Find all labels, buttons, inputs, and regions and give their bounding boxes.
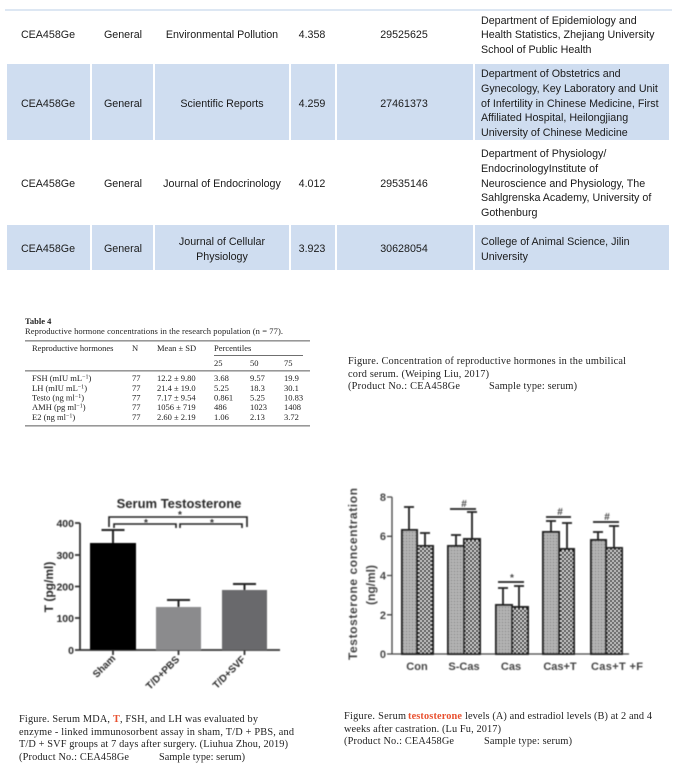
table 4 rows: Testo (ng ml (32, 392, 75, 402)
table row: Journal of Cellular Physiology: College of Animal Science, Jilin (481, 236, 630, 248)
table 4 rows: −1 (75, 394, 81, 400)
table row: Journal of Endocrinology: CEA458Ge (21, 178, 75, 190)
table 4 rows: 77 (132, 383, 140, 393)
significance brackets (109, 510, 247, 529)
table row: Environmental Pollution: CEA458Ge (21, 29, 75, 41)
table 4 rows: 30.1 (284, 383, 299, 393)
x axis labels (91, 653, 248, 692)
table row: Journal of Cellular Physiology: 30628054 (380, 243, 428, 255)
caption: serum MDA, T, FSH and LH: , FSH, and LH was evaluated by (120, 714, 259, 725)
table row: Scientific Reports (7, 64, 669, 140)
y axis and ticks: 400 (56, 518, 74, 530)
caption: hormone concentrations: Sample type: serum) (489, 381, 577, 392)
caption: serum MDA, T, FSH and LH (19, 714, 295, 763)
table row: Environmental Pollution (21, 15, 655, 56)
table 4 rows: 77 (132, 402, 140, 412)
x axis labels: Sham (91, 653, 118, 680)
y axis and ticks: 6 (380, 531, 386, 543)
table row: Journal of Endocrinology: Gothenburg (481, 207, 538, 219)
bar: Sham (90, 530, 136, 650)
table row: Scientific Reports: CEA458Ge (21, 98, 75, 110)
significance markers: # (461, 499, 467, 510)
y axis and ticks: 0 (68, 645, 74, 657)
caption: testosterone and estradiol levels: levels (A) and estradiol levels (B) at 2 and 4 (465, 711, 652, 722)
y axis and ticks: 300 (56, 550, 74, 562)
table 4 rows: 1408 (284, 402, 301, 412)
table 4 rows: 77 (132, 392, 140, 402)
table 4 rows: −1 (76, 404, 83, 410)
significance markers: # (557, 507, 563, 518)
x axis labels: Cas+T +F (591, 661, 643, 673)
table row: Journal of Endocrinology: EndocrinologyInstitute of (481, 163, 598, 175)
table 4 rows (32, 373, 303, 422)
table 4 rows: 5.25 (250, 392, 265, 402)
y axis and ticks: 4 (380, 570, 387, 582)
bars: Cas+T (543, 532, 574, 654)
y axis and ticks (56, 518, 280, 657)
table row: Journal of Endocrinology: Neuroscience and Physiology, The (481, 178, 645, 190)
table 4 rows: 9.57 (250, 373, 265, 383)
caption: serum MDA, T, FSH and LH: enzyme ‑ linked immunosorbent assay in sham, T/D + PBS, and (19, 727, 295, 738)
y axis and ticks: 2 (380, 610, 386, 622)
significance brackets: * (144, 518, 148, 529)
table row: Journal of Endocrinology: General (104, 178, 142, 190)
table 4 header (32, 343, 292, 368)
table 4: reproductive hormones (25, 316, 310, 426)
table 4 rows: E2 (ng ml (32, 412, 66, 422)
caption: testosterone and estradiol levels: Sample type: serum) (484, 736, 572, 747)
table row: Journal of Endocrinology (21, 148, 651, 219)
y axis and ticks: 0 (380, 649, 386, 661)
table 4 title: Table 4 (25, 316, 52, 326)
x axis labels: Con (406, 661, 428, 673)
y axis and ticks: 100 (56, 613, 74, 625)
table row: Scientific Reports: Gynecology, Key Laboratory and Unit (481, 83, 658, 95)
table row: Environmental Pollution: Environmental Pollution (166, 29, 278, 41)
table 4 header: Mean ± SD (157, 343, 196, 353)
caption: hormone concentrations: (Product No.: CEA458Ge (348, 381, 460, 392)
table 4 rows: 1023 (250, 402, 267, 412)
error bars (404, 507, 619, 607)
table 4 rows: −1 (82, 374, 88, 380)
table row: Journal of Endocrinology: 29535146 (380, 178, 428, 190)
caption: hormone concentrations (348, 356, 626, 392)
table 4 header: Percentiles (214, 343, 251, 353)
table row: Journal of Endocrinology: 4.012 (299, 178, 325, 190)
table row: Environmental Pollution: School of Public Health (481, 44, 592, 56)
table row: Scientific Reports: General (104, 98, 142, 110)
table 4 header: 25 (214, 358, 222, 368)
table row: Scientific Reports: University of Chinese Medicine (481, 127, 628, 139)
table 4 rows: ) (84, 383, 87, 393)
caption: testosterone and estradiol levels (344, 711, 652, 747)
table row: Journal of Cellular Physiology: Physiology (196, 251, 248, 263)
caption: serum MDA, T, FSH and LH: Figure. Serum MDA, (19, 714, 110, 725)
bar: T/D+PBS (156, 600, 201, 650)
table 4 rows: −1 (78, 384, 84, 390)
table 4 rows: AMH (pg ml (32, 402, 76, 412)
caption: hormone concentrations: Figure. Concentration of reproductive hormones in the umbilical (348, 356, 626, 367)
x axis labels: T/D+SVF (211, 654, 248, 691)
table row: Journal of Cellular Physiology: Journal of Cellular (179, 236, 266, 248)
bars: Con (402, 530, 433, 654)
table 4 header: 75 (284, 358, 292, 368)
caption: testosterone and estradiol levels: weeks after castration. (Lu Fu, 2017) (344, 724, 501, 735)
table 4 rows: 1.06 (214, 412, 229, 422)
table 4 rows: 486 (214, 402, 227, 412)
significance markers (450, 499, 619, 584)
table row: Environmental Pollution: 29525625 (380, 29, 428, 41)
significance brackets: * (178, 510, 182, 521)
table 4 rows: 21.4 ± 19.0 (157, 383, 196, 393)
table 4 caption: Reproductive hormone concentrations in the research population (n = 77). (25, 326, 283, 336)
significance brackets: * (210, 518, 214, 529)
x axis labels (406, 661, 643, 673)
caption: testosterone and estradiol levels: Figure. Serum (344, 711, 406, 722)
table 4 header: Reproductive hormones (32, 343, 113, 353)
table 4 rows: 2.60 ± 2.19 (157, 412, 196, 422)
table 4 rows: 2.13 (250, 412, 265, 422)
table 4 rows: FSH (mIU mL (32, 373, 82, 383)
bar chart: testosterone concentration by group (346, 488, 643, 673)
table 4 rows: 1056 ± 719 (157, 402, 196, 412)
table row: Environmental Pollution: 4.358 (299, 29, 325, 41)
table 4 header: N (132, 343, 138, 353)
table 4 rows: ) (81, 392, 84, 402)
table row: Journal of Endocrinology: Department of Physiology/ (481, 148, 606, 160)
x axis labels: T/D+PBS (144, 654, 182, 692)
x axis labels: Cas (501, 661, 521, 673)
bars: S-Cas (448, 539, 480, 654)
chart title: Serum Testosterone (117, 496, 241, 511)
caption: serum MDA, T, FSH and LH: T (113, 714, 120, 725)
y axis and ticks (380, 492, 629, 661)
table 4 rows: 3.72 (284, 412, 299, 422)
table 4 rows: 12.2 ± 9.80 (157, 373, 196, 383)
table row: Journal of Cellular Physiology (7, 225, 669, 270)
caption: testosterone and estradiol levels: testosterone (408, 711, 462, 722)
bars: Cas (496, 605, 528, 654)
table row: Environmental Pollution: General (104, 29, 142, 41)
significance markers: * (510, 573, 514, 584)
y axis titles: Testosterone concentration (346, 488, 360, 660)
bar: T/D+SVF (222, 584, 267, 650)
table 4 rows: 7.17 ± 9.54 (157, 392, 196, 402)
y axis and ticks: 8 (380, 492, 386, 504)
table row: Journal of Endocrinology: Journal of Endocrinology (163, 178, 281, 190)
table row: Scientific Reports: Scientific Reports (180, 98, 264, 110)
table 4 rows: 18.3 (250, 383, 265, 393)
table row: Scientific Reports: Affiliated Hospital, Heilongjiang (481, 112, 628, 124)
significance markers: # (604, 512, 610, 523)
table row: Scientific Reports: 4.259 (299, 98, 325, 110)
table 4 rows: LH (mIU mL (32, 383, 78, 393)
table 4 rows: 19.9 (284, 373, 299, 383)
table row: Journal of Cellular Physiology: CEA458Ge (21, 243, 75, 255)
table 4 rows: 5.25 (214, 383, 229, 393)
bars: Cas+T+F (591, 540, 622, 654)
caption: serum MDA, T, FSH and LH: (Product No.: CEA458Ge (19, 752, 129, 763)
table 4 rows: ) (83, 402, 86, 412)
y axis titles: (ng/ml) (364, 565, 378, 605)
table 4 rows: 10.83 (284, 392, 303, 402)
x axis labels: S-Cas (448, 661, 480, 673)
y axis title: T (pg/ml) (42, 562, 56, 612)
y axis titles (346, 488, 378, 660)
table 4 rows: 0.861 (214, 392, 233, 402)
table 4 rows: 77 (132, 373, 140, 383)
table row: Environmental Pollution: Health Statistics, Zhejiang University (481, 29, 655, 41)
table row: Scientific Reports: 27461373 (380, 98, 428, 110)
caption: serum MDA, T, FSH and LH: T/D + SVF groups at 7 days after surgery. (Liuhua Zhou, 2019) (19, 739, 288, 750)
caption: serum MDA, T, FSH and LH: Sample type: serum) (159, 752, 245, 763)
caption: hormone concentrations: cord serum. (Weiping Liu, 2017) (348, 369, 489, 380)
citation table (5, 9, 672, 270)
table row: Journal of Cellular Physiology: University (481, 251, 529, 263)
table row: Environmental Pollution: Department of Epidemiology and (481, 15, 637, 27)
table 4 rows: 3.68 (214, 373, 229, 383)
table row: Journal of Cellular Physiology: 3.923 (299, 243, 325, 255)
table row: Scientific Reports: of Infertility in Chinese Medicine, First (481, 98, 659, 110)
table row: Scientific Reports: Department of Obstetrics and (481, 68, 621, 80)
bar chart: serum testosterone (42, 496, 280, 692)
table 4 rows: ) (72, 412, 75, 422)
table 4 rows: 77 (132, 412, 140, 422)
table 4 header: 50 (250, 358, 258, 368)
table 4 rows: ) (88, 373, 91, 383)
table row: Journal of Cellular Physiology: General (104, 243, 142, 255)
table row: Journal of Endocrinology: Sahlgrenska Academy, University of (481, 192, 651, 204)
y axis and ticks: 200 (56, 582, 74, 594)
table 4 rows: −1 (66, 414, 72, 420)
caption: testosterone and estradiol levels: (Product No.: CEA458Ge (344, 736, 454, 747)
x axis labels: Cas+T (543, 661, 577, 673)
